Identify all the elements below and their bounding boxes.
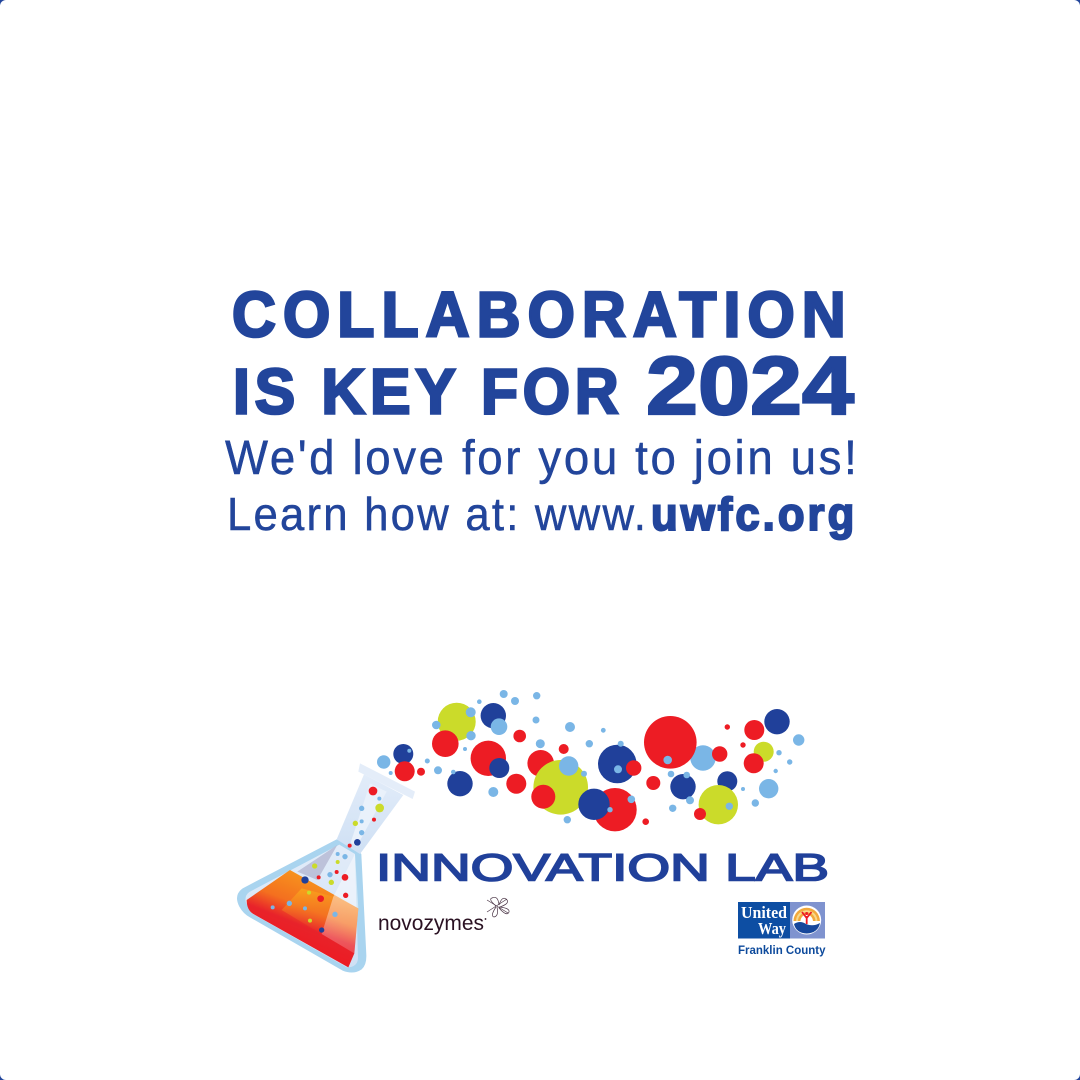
liquid [247, 870, 358, 967]
logo: United Way Franklin County: Way [758, 919, 787, 938]
flask particles [317, 787, 377, 902]
novozymes clover mark [487, 897, 509, 917]
logo: novozymes [378, 897, 509, 935]
text: learn how link [227, 488, 854, 540]
heading line: IS KEY FOR: IS KEY FOR [233, 356, 619, 428]
flask outer body [237, 839, 366, 973]
flask inner glass [245, 845, 358, 967]
learn how prefix: Learn how at: www. [227, 488, 646, 540]
link domain: uwfc.org [651, 488, 854, 540]
Franklin County label: Franklin County [738, 943, 826, 957]
heading: collaboration is key for 2024 [232, 279, 854, 432]
logo: United Way Franklin County [738, 902, 826, 957]
United Way symbol [792, 906, 821, 934]
icon: tilted flask [237, 763, 415, 973]
icon: bubbles [377, 690, 804, 831]
flask neck [337, 774, 403, 854]
liquid highlight [322, 897, 358, 953]
United Way wordmark: United [741, 903, 787, 922]
blue panel [738, 902, 790, 938]
logo text: INNOVATION LAB: INNOVATION LAB [376, 848, 829, 890]
novozymes wordmark: novozymes [378, 911, 484, 935]
heading line: COLLABORATION: COLLABORATION [232, 279, 846, 351]
heading year: 2024: 2024 [646, 339, 854, 432]
periwinkle panel [790, 902, 825, 938]
shadow above liquid [297, 845, 337, 880]
text: invitation: We'd love for you to join us! [225, 431, 857, 484]
flask rim [358, 763, 415, 799]
